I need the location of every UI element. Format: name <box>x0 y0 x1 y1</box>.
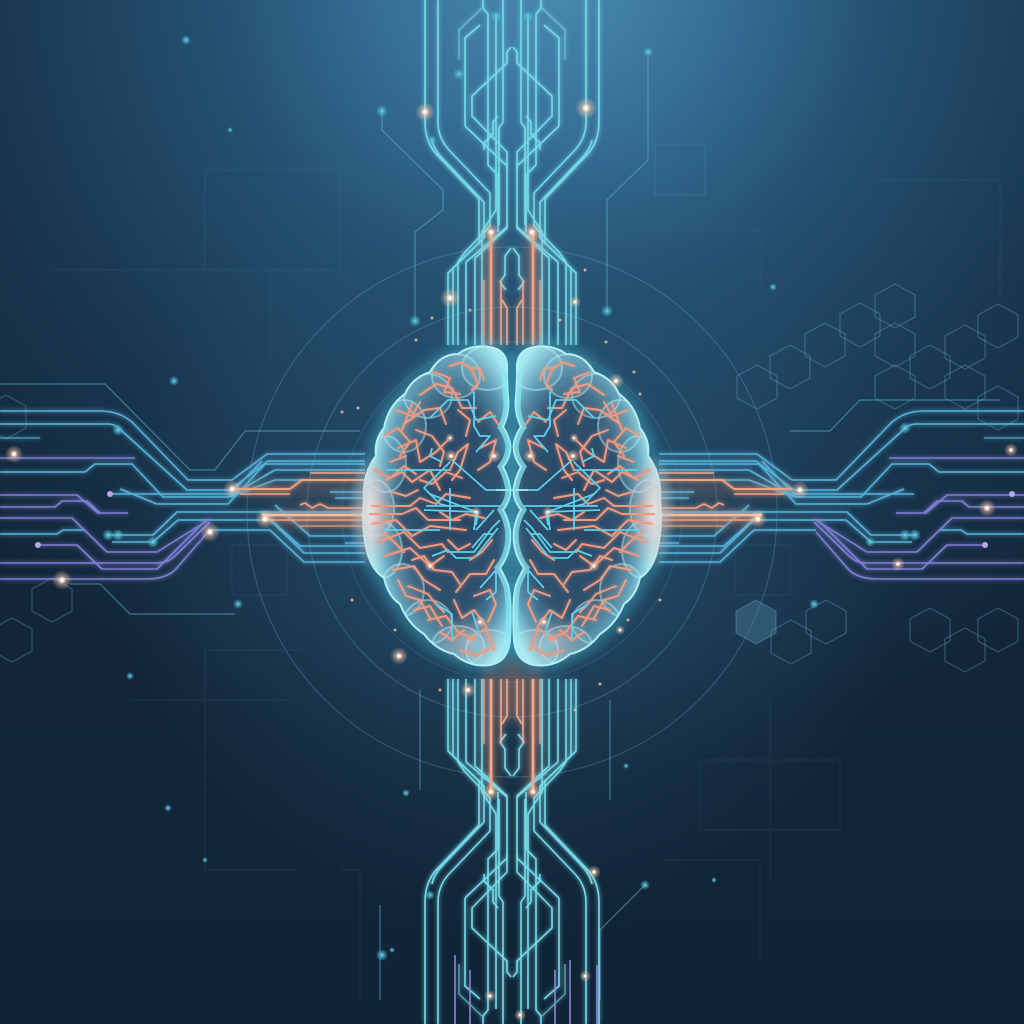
cyan circuit nodes <box>102 10 921 961</box>
translucent outer gyri <box>358 346 514 670</box>
corpus connection <box>496 489 528 491</box>
bottom circuit traces mirrored <box>513 679 599 1024</box>
orange channel glow <box>486 236 538 790</box>
cyan inner circuit <box>384 392 510 650</box>
brain: left hemisphere <box>348 346 514 670</box>
hexagon cluster right <box>0 284 1018 672</box>
hot nodes <box>424 433 501 628</box>
orange neural veins <box>370 362 498 656</box>
horizontal circuit traces (left) <box>0 411 365 579</box>
lobe body <box>363 346 511 666</box>
top circuit traces mirrored <box>513 0 599 345</box>
purple bottom accents <box>455 955 597 1024</box>
inner edge rim <box>500 372 511 640</box>
orange horizontal glow <box>240 485 794 524</box>
lower edge glow <box>434 616 506 664</box>
orange channel traces <box>484 232 501 345</box>
faint technical rectangles <box>50 145 1000 1000</box>
scattered sparks around brain <box>340 268 662 712</box>
concentric rings <box>247 247 777 777</box>
outer glow <box>363 346 511 666</box>
lateral edge glow <box>348 454 396 570</box>
orange vein glow <box>370 362 498 656</box>
brain: right hemisphere <box>510 346 676 670</box>
purple circuit nodes <box>35 491 1015 548</box>
horizontal circuit traces (right) <box>659 411 1024 579</box>
top circuit traces (left half) <box>425 0 511 345</box>
bottom circuit traces <box>425 679 511 1024</box>
